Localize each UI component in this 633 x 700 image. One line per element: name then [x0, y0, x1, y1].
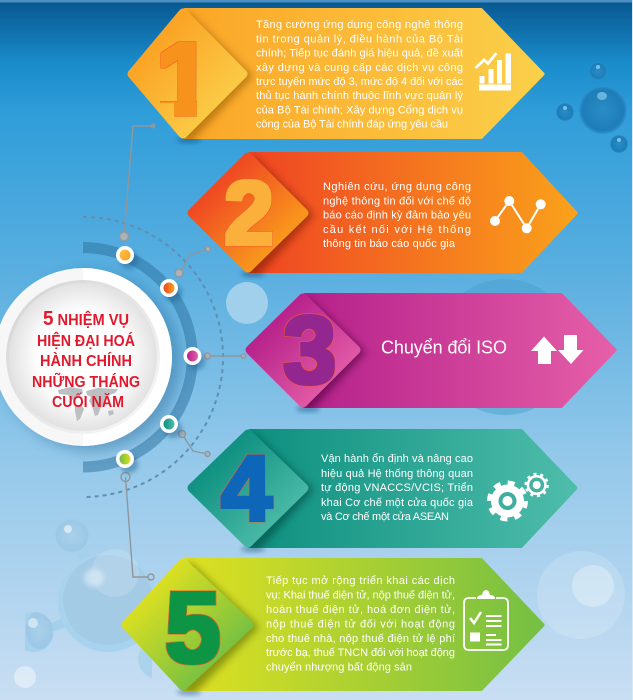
icon: line chart	[490, 196, 546, 233]
icon: up and down arrows	[531, 335, 584, 364]
text block: của Bộ Tài chính; Xây dựng Cổng dịch vụ	[256, 104, 463, 116]
panel 3	[249, 295, 614, 414]
diamond	[192, 434, 304, 543]
light circle	[226, 282, 268, 324]
text block: thông tin báo cáo quốc gia	[323, 238, 456, 250]
text block: xây dựng và cung cấp các dịch vụ công	[256, 62, 463, 74]
text block: Tiếp tục mở rộng triển khai các dịch	[266, 575, 455, 587]
diamond	[250, 298, 356, 403]
text block: báo cáo định kỳ đảm bảo yêu	[323, 210, 471, 222]
panel 5	[124, 560, 542, 698]
icon: gears	[490, 474, 548, 519]
text block	[323, 181, 471, 250]
text block: trước bạ, thuế TNCN đối với hoạt động	[266, 647, 455, 659]
text block: Tăng cường ứng dụng công nghệ thông	[256, 19, 463, 31]
number 3: 3	[283, 297, 336, 404]
panel 4	[190, 431, 576, 555]
connector lines	[120, 124, 246, 580]
bubble behind panel 3	[437, 279, 573, 415]
text block: Vận hành ổn định và nâng cao	[321, 453, 473, 465]
text block: chuyển nhượng bất động sản	[266, 662, 412, 674]
text block: nghệ thông tin đối với chế độ	[323, 196, 471, 208]
panel 1	[130, 10, 542, 145]
connector 2	[175, 246, 210, 277]
heading text: NHỮNG THÁNG	[32, 373, 140, 391]
text block: tin trong quản lý, điều hành của Bộ Tài	[256, 33, 463, 45]
text block: vụ: Khai thuế điện tử, nộp thuế điện tử,	[266, 589, 455, 601]
text block	[266, 575, 455, 674]
bubbles: top right	[556, 62, 628, 153]
text block: cho thuê nhà, nộp thuế điện tử lệ phí	[266, 633, 455, 645]
panel 2	[190, 154, 576, 280]
diamond	[126, 563, 249, 686]
text block: chính; Tiếp tục đánh giá hiệu quả, đề xuất	[256, 48, 463, 60]
text block: và Cơ chế một cửa ASEAN	[321, 511, 449, 523]
heading text: CUỐI NĂM	[52, 393, 124, 411]
heading text	[32, 308, 140, 411]
connector 1	[120, 124, 155, 241]
node 3	[184, 347, 205, 370]
text block: thủ tục hành chính thuộc lĩnh vực quản lý	[256, 90, 464, 102]
connector 4	[178, 430, 210, 456]
heading text: HIỆN ĐẠI HOÁ	[37, 332, 135, 350]
text block: khai Cơ chế một cửa quốc gia	[321, 497, 474, 509]
thick arc	[83, 248, 192, 467]
bubbles: bottom right	[537, 551, 625, 639]
number 5: 5	[165, 572, 221, 684]
heading text: 5 NHIỆM VỤ	[43, 308, 129, 330]
node 4	[160, 415, 182, 438]
number 4: 4	[221, 438, 272, 540]
connector 5	[121, 472, 154, 580]
number 1: 1	[156, 22, 213, 136]
dashed arc	[83, 217, 223, 497]
text block	[256, 19, 464, 131]
text block: trực tuyến mức độ 3, mức độ 4 đối với các	[256, 76, 464, 88]
text block: nộp thuế điện tử đối với hoạt động	[266, 618, 455, 630]
text block: hoàn thuế điện tử, hoá đơn điện tử,	[266, 604, 455, 616]
text: Chuyển đổi ISO: Chuyển đổi ISO	[381, 338, 507, 358]
number 2: 2	[224, 164, 274, 264]
text block: cầu kết nối với Hệ thống	[323, 224, 471, 236]
node 2	[160, 279, 182, 302]
bubbles: bottom left molecule	[14, 520, 158, 688]
text block: hiệu quả Hệ thống thông quan	[321, 468, 473, 480]
text block: tự động VNACCS/VCIS; Triển	[321, 482, 473, 494]
node 5	[116, 450, 138, 473]
world map	[58, 387, 118, 421]
central circle	[0, 268, 181, 451]
connector 3	[204, 353, 246, 359]
diamond	[132, 13, 243, 134]
text block	[321, 453, 474, 523]
text block: công của Bộ Tài chính đáp ứng yêu cầu	[256, 119, 448, 131]
icon: bar chart	[476, 53, 511, 90]
heading text: HÀNH CHÍNH	[40, 353, 132, 370]
text block: Nghiên cứu, ứng dụng công	[323, 181, 471, 193]
node 1	[116, 246, 138, 269]
node dots	[116, 246, 205, 473]
diamond	[192, 157, 304, 268]
icon: clipboard	[464, 590, 508, 650]
